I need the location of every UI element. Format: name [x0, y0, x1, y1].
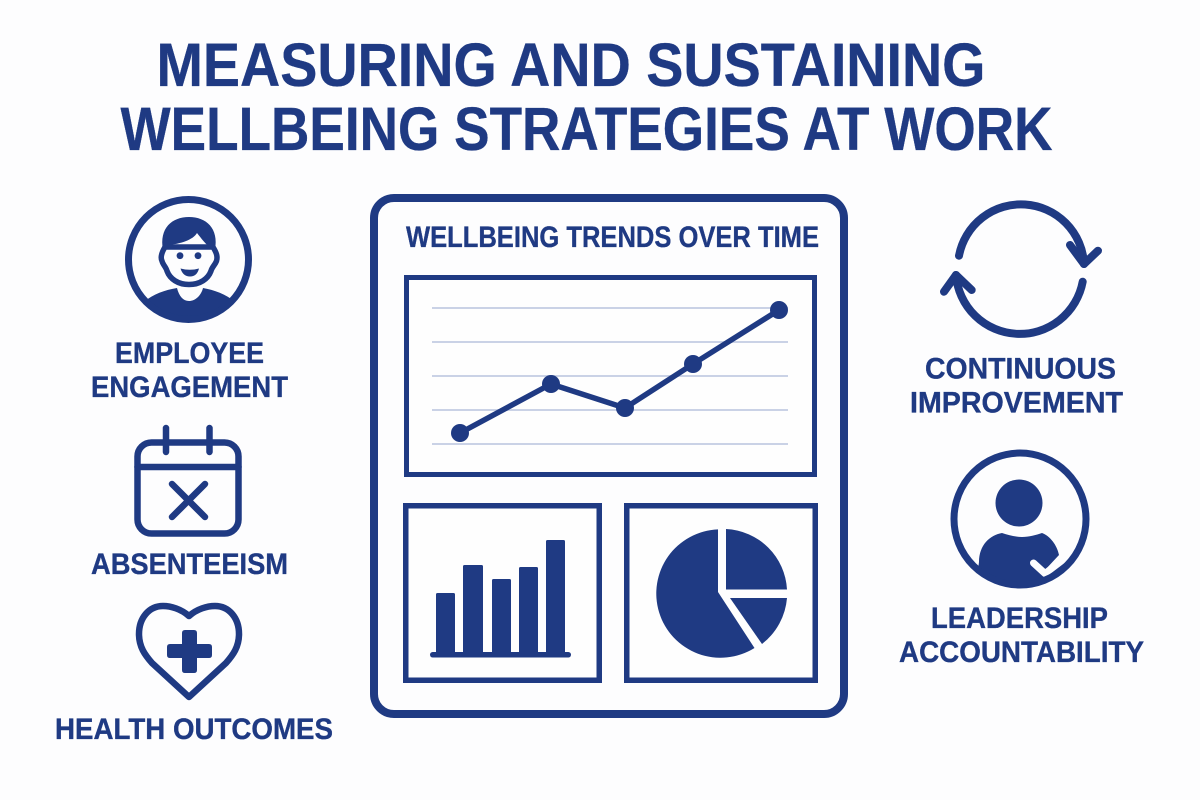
label: leadership accountability: LEADERSHIP [931, 602, 1108, 635]
panel: leadership accountability [899, 453, 1144, 669]
panel: absenteeism [91, 428, 288, 581]
line chart [406, 278, 814, 474]
icon: leader in circle [954, 453, 1086, 592]
label: leadership accountability: ACCOUNTABILITY [899, 636, 1144, 669]
panel: health outcomes [55, 606, 333, 746]
label: employee engagement: EMPLOYEE [115, 337, 264, 370]
panel: continuous improvement [910, 204, 1123, 420]
title: WELLBEING STRATEGIES AT WORK [120, 95, 1052, 163]
title [120, 31, 1052, 163]
icon: smiling employee [128, 200, 248, 330]
panel: employee engagement [91, 200, 288, 404]
label: health outcomes: HEALTH OUTCOMES [55, 713, 333, 746]
icon: cycle arrows [944, 204, 1098, 334]
label: continuous improvement: CONTINUOUS [925, 352, 1116, 386]
icon: calendar with cross [138, 428, 238, 534]
panel: dashboard [374, 198, 844, 714]
label: absenteeism: ABSENTEEISM [91, 548, 288, 581]
title: MEASURING AND SUSTAINING [156, 31, 986, 99]
label: continuous improvement [910, 352, 1123, 420]
icon: heart with plus [139, 606, 239, 697]
dashboard frame [374, 198, 844, 714]
bar chart [406, 506, 599, 680]
pie chart [627, 506, 815, 680]
label: continuous improvement: IMPROVEMENT [910, 386, 1123, 420]
label: employee engagement [91, 337, 288, 404]
dashboard heading: WELLBEING TRENDS OVER TIME [406, 221, 819, 254]
label: leadership accountability [899, 602, 1144, 669]
label: employee engagement: ENGAGEMENT [91, 371, 288, 404]
